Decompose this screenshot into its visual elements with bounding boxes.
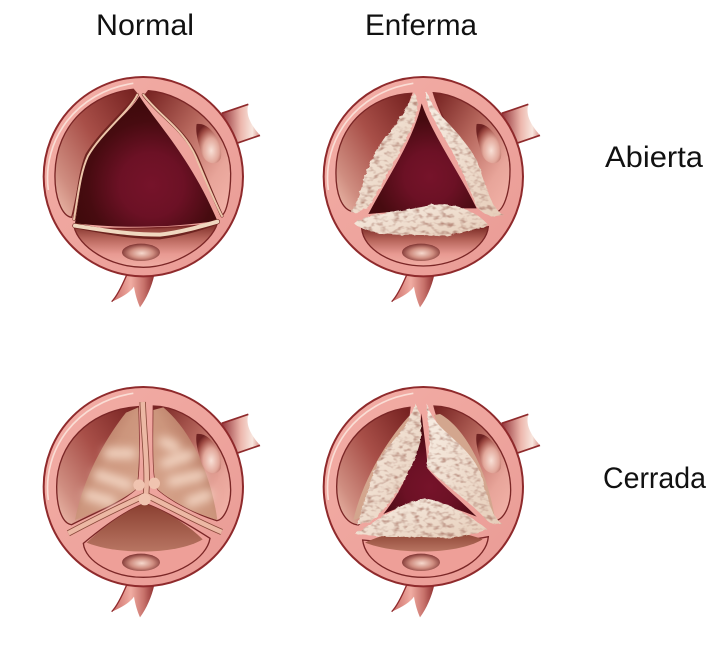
calcified leaflets <box>355 403 502 538</box>
left sinus <box>55 89 137 217</box>
bottom sinus <box>363 537 488 577</box>
highlight bands on right leaflet <box>163 442 208 502</box>
bottom sinus <box>74 223 217 267</box>
bottom leaflet <box>83 503 210 577</box>
orifice <box>368 103 477 214</box>
right sinus <box>434 406 511 521</box>
calcified leaflets <box>350 92 504 236</box>
orifice <box>383 413 477 517</box>
right leaflet <box>153 406 231 521</box>
open leaflets <box>74 95 222 237</box>
valve: normal, open <box>44 77 260 307</box>
bottom sinus <box>362 227 488 266</box>
orifice <box>75 96 217 227</box>
valve: normal, closed <box>44 387 260 617</box>
row label: Abierta: Abierta <box>605 141 703 174</box>
highlight bands on left leaflet <box>88 453 132 502</box>
commissures <box>68 402 222 533</box>
left sinus <box>336 93 412 212</box>
heading: Normal: Normal <box>96 9 194 42</box>
left sinus <box>337 407 410 525</box>
right sinus <box>145 91 231 215</box>
valve: diseased, closed <box>324 387 540 617</box>
valve: diseased, open <box>324 77 540 307</box>
heading: Enferma: Enferma <box>365 9 477 42</box>
nodules <box>133 478 160 505</box>
left leaflet <box>57 407 139 525</box>
row label: Cerrada: Cerrada <box>603 462 706 495</box>
right sinus <box>433 93 510 213</box>
